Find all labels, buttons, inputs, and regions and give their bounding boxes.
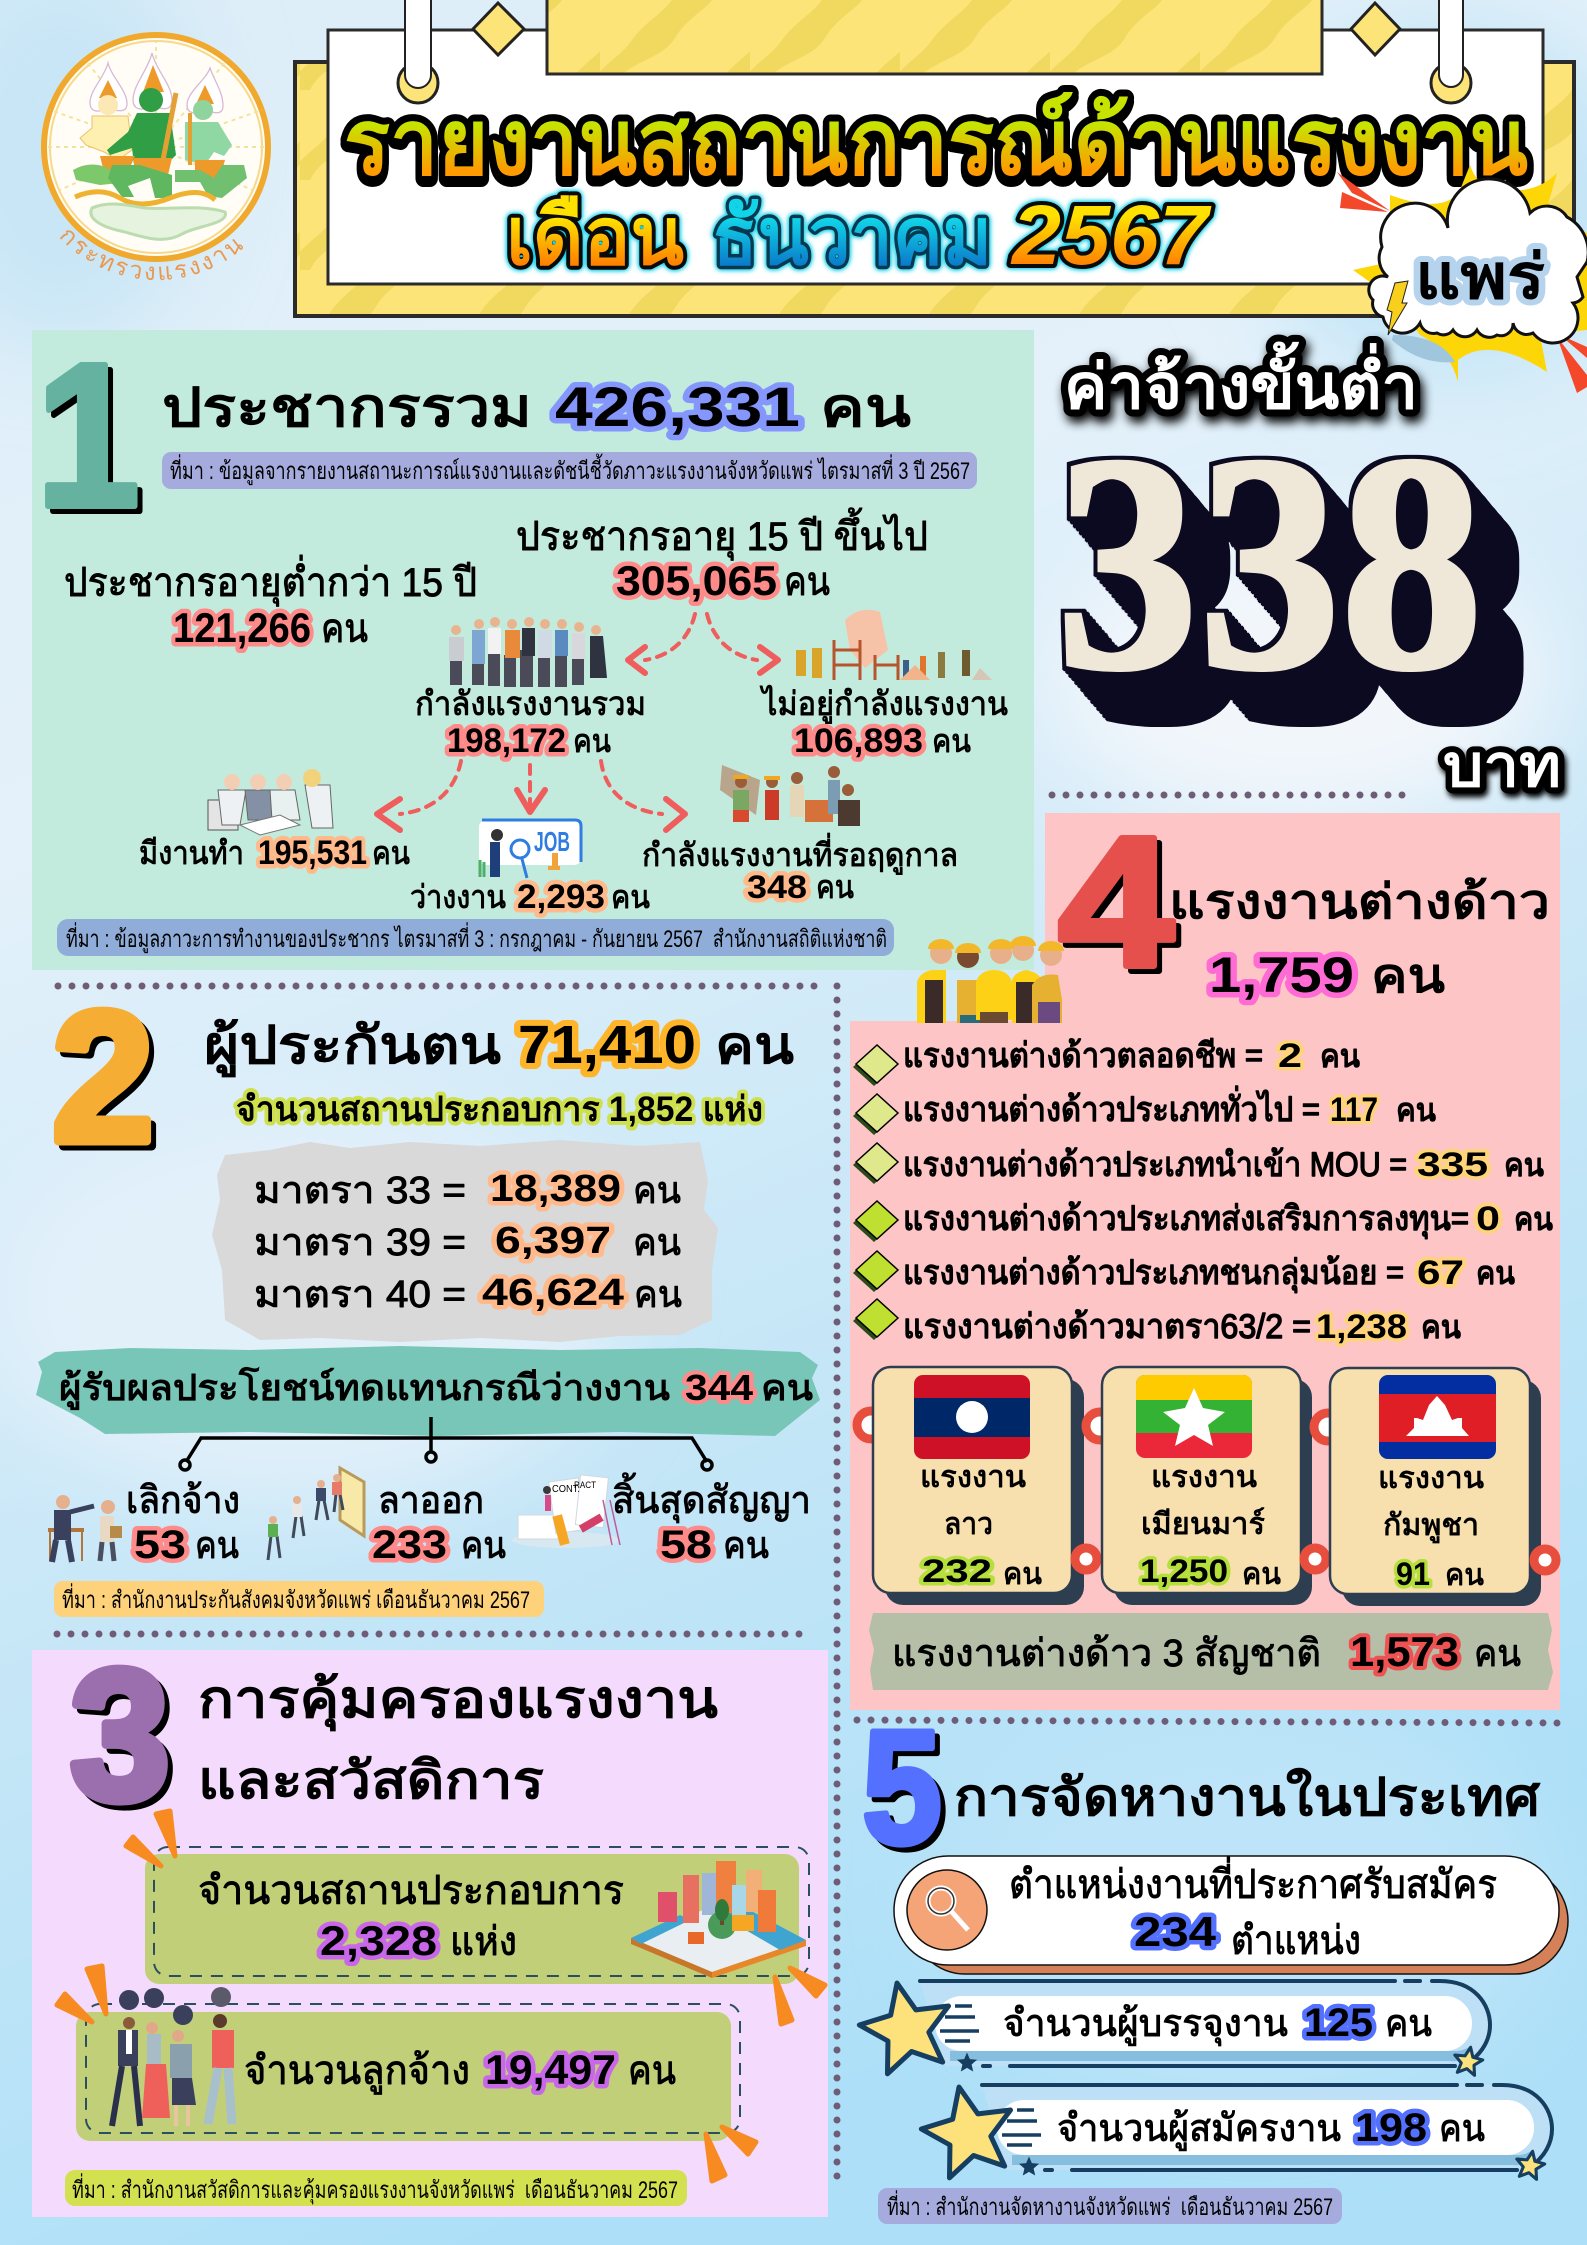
population under 15: คน: [321, 607, 368, 651]
province badge: [1337, 165, 1587, 393]
section table: 46,624: [482, 1272, 624, 1314]
section table: มาตรา 33 =: [254, 1170, 466, 1212]
card: establishments: จำนวนสถานประกอบการ: [198, 1869, 624, 1913]
band: placed: [852, 1974, 1490, 2077]
burst: employees top left: [57, 1966, 106, 2022]
card: Cambodia: [1314, 1368, 1556, 1606]
contract ended: สิ้นสุดสัญญา: [612, 1472, 811, 1523]
benefit band: [36, 1346, 820, 1436]
source note 1: ที่มา : ข้อมูลจากรายงานสถานะการณ์แรงงานและดัชนีชี้วัดภาวะแรงงานจังหวัดแพร่ ไตรมาสที่ 3 ปี 2567: [170, 453, 970, 486]
card: Cambodia: คน: [1445, 1559, 1484, 1592]
wage amount: 338: [1056, 392, 1483, 735]
card: establishments: แห่ง: [450, 1920, 517, 1964]
card: establishments: [145, 1847, 809, 1984]
unemployed: 2,293: [517, 878, 605, 916]
flag: Myanmar: [1136, 1375, 1252, 1458]
badge: red shards: [1337, 172, 1587, 393]
benefit band: คน: [761, 1367, 813, 1408]
burst: employees bottom right: [706, 2127, 756, 2181]
section table: มาตรา 39 =: [254, 1222, 466, 1264]
banner white card: [328, 30, 1543, 284]
row 4: คน: [1514, 1201, 1553, 1237]
panel 1 heading: คน: [820, 378, 911, 438]
unemployed: [410, 878, 650, 916]
minimum wage: [1056, 341, 1561, 799]
banner back panel: [295, 62, 1574, 316]
badge: yellow burst: [1353, 165, 1587, 382]
three nationalities band: แรงงานต่างด้าว 3 สัญชาติ: [892, 1633, 1321, 1675]
population under 15: [64, 555, 477, 651]
outside workforce: ไม่อยู่กำลังแรงงาน: [759, 685, 1008, 724]
source note 4: [65, 2170, 687, 2206]
workforce total: คน: [573, 723, 611, 759]
panel 3: protection: [32, 1632, 828, 2217]
three nationalities band: [869, 1613, 1553, 1690]
section table: คน: [633, 1170, 681, 1212]
pill: vacancies: ตำแหน่ง: [1231, 1919, 1361, 1963]
icon: people: [112, 1987, 234, 2126]
card: employees: จำนวนลูกจ้าง: [244, 2049, 470, 2094]
panel 4 heading: แรงงานต่างด้าว: [1169, 876, 1550, 929]
source note 5: [878, 2188, 1342, 2224]
section table: คน: [633, 1222, 681, 1264]
card: Myanmar: แรงงาน: [1151, 1461, 1257, 1494]
arrow: to unemployed: [517, 765, 545, 812]
source note 4: ที่มา : สำนักงานสวัสดิการและคุ้มครองแรงงานจังหวัดแพร่ เดือนธันวาคม 2567: [72, 2173, 678, 2205]
subtitle: [506, 188, 1211, 282]
panel 1 heading: 426,331: [555, 375, 800, 438]
section table: [212, 1140, 718, 1342]
list of foreign worker types: [853, 1037, 1553, 1346]
panel 4 heading: [1169, 876, 1550, 1003]
band: placed: 125: [1304, 2001, 1373, 2045]
section table: มาตรา 40 =: [254, 1274, 466, 1316]
card: employees: [76, 1987, 740, 2141]
panel 1 heading: ประชากรรวม: [162, 378, 532, 438]
icon: employed team: [208, 769, 333, 835]
wage unit: บาท: [1443, 734, 1561, 799]
three nationalities band: 1,573: [1350, 1628, 1459, 1675]
arrow: to workforce: [628, 614, 695, 673]
row 6: คน: [1421, 1309, 1461, 1345]
benefit band: 344: [685, 1367, 753, 1408]
row 3: แรงงานต่างด้าวประเภทนำเข้า MOU =: [903, 1146, 1407, 1184]
row 2: คน: [1396, 1092, 1436, 1128]
badge: lightning: [1387, 281, 1408, 335]
row 3: 335: [1417, 1146, 1488, 1184]
panel 5: job placement: [852, 1697, 1568, 2224]
row 6: 1,238: [1316, 1308, 1407, 1346]
icon: small star: [1452, 2045, 1485, 2076]
employed: คน: [372, 835, 410, 871]
contract ended: คน: [723, 1525, 769, 1567]
card: Cambodia: 91: [1396, 1556, 1430, 1592]
badge: halftone: [1392, 335, 1455, 362]
panel 3 heading: [198, 1671, 719, 1810]
icon: contract end: RACT: [574, 1480, 596, 1490]
card: Laos: ลาว: [944, 1508, 993, 1541]
numeral 4: 4: [1058, 799, 1174, 1006]
left ring: [398, 0, 438, 103]
card: Myanmar: คน: [1242, 1558, 1281, 1591]
row 1: แรงงานต่างด้าวตลอดชีพ =: [903, 1037, 1263, 1075]
workforce total: กำลังแรงงานรวม: [415, 685, 646, 722]
wage heading: ค่าจ้างขั้นต่ำ: [1064, 341, 1418, 422]
band: placed: จำนวนผู้บรรจุงาน: [1003, 2003, 1288, 2046]
source note 1: [162, 452, 977, 489]
icon: workers with caps: [917, 936, 1064, 1023]
right diamond: [1351, 3, 1400, 55]
row 5: คน: [1476, 1255, 1515, 1291]
card: Myanmar: 1,250: [1140, 1553, 1228, 1589]
section table: 18,389: [490, 1168, 621, 1210]
icon: job search: JOB: [534, 826, 570, 857]
seasonal workforce: กำลังแรงงานที่รอฤดูกาล: [642, 833, 958, 875]
card: Myanmar: [1086, 1367, 1326, 1605]
icon: contract end: CONT.: [552, 1484, 580, 1495]
source note 3: ที่มา : สำนักงานประกันสังคมจังหวัดแพร่ เดือนธันวาคม 2567: [62, 1583, 530, 1614]
icon: magnifier: [907, 1870, 987, 1950]
card: Laos: 232: [922, 1553, 992, 1589]
icon: resignation: [268, 1468, 364, 1560]
pill: vacancies: 234: [1134, 1908, 1217, 1955]
dismissed: คน: [195, 1525, 239, 1567]
row 4: 0: [1476, 1200, 1500, 1238]
panel 2 heading: คน: [715, 1017, 794, 1075]
establishments: จำนวนสถานประกอบการ 1,852 แห่ง: [236, 1090, 763, 1129]
outside workforce: คน: [932, 723, 971, 759]
icon: dismissal: [48, 1495, 122, 1562]
employed: มีงานทำ: [139, 835, 244, 871]
population 15 and over: ประชากรอายุ 15 ปี ขึ้นไป: [516, 507, 928, 561]
section table: คน: [634, 1274, 682, 1316]
numeral 1: 1: [36, 321, 140, 550]
row 1: [853, 1037, 1360, 1086]
icon: job search: [479, 820, 581, 878]
logo: ministry name: กระทรวงแรงงาน: [60, 230, 243, 280]
workforce total: [415, 685, 646, 760]
panel 1: population: [32, 321, 1034, 970]
right ring: [1431, 0, 1471, 103]
band: applicants: [914, 2078, 1552, 2181]
icon: construction: [796, 610, 992, 680]
flag: Cambodia: [1379, 1375, 1496, 1459]
arrow: to seasonal: [601, 761, 685, 830]
header banner: [295, 0, 1574, 316]
dismissed: [126, 1480, 240, 1567]
contract ended: [612, 1472, 811, 1567]
row 5: 67: [1417, 1254, 1464, 1292]
dismissed: เลิกจ้าง: [126, 1480, 240, 1522]
card: Myanmar: เมียนมาร์: [1141, 1507, 1265, 1541]
subtitle: month name: ธันวาคม: [712, 192, 992, 281]
arrow: to outside workforce: [707, 614, 778, 673]
panel 4: foreign workers: [850, 799, 1560, 1710]
panel 2 heading: 71,410: [518, 1015, 696, 1075]
logo: three figures: [73, 53, 247, 204]
panel 4 heading: 1,759: [1209, 947, 1354, 1003]
workforce total: 198,172: [447, 722, 566, 760]
source note 2: [57, 919, 894, 956]
banner top tab: [547, 0, 1322, 74]
icon: city: [631, 1861, 806, 1978]
icon: farmers: [720, 765, 860, 826]
subtitle: month label: เดือน: [506, 192, 684, 281]
panel 2 heading: [204, 1015, 794, 1078]
band: applicants: 198: [1355, 2106, 1427, 2150]
population under 15: ประชากรอายุต่ำกว่า 15 ปี: [64, 555, 477, 607]
contract ended: 58: [660, 1523, 712, 1567]
burst: establishments top left: [126, 1811, 175, 1866]
badge: province name: แพร่: [1415, 243, 1545, 312]
seasonal workforce: [642, 833, 958, 905]
panel 3 heading: การคุ้มครองแรงงาน: [198, 1671, 719, 1732]
three nationalities band: คน: [1474, 1633, 1521, 1675]
row 2: [853, 1086, 1436, 1135]
dismissed: 53: [134, 1523, 186, 1567]
main title: รายงานสถานการณ์ด้านแรงงาน: [344, 91, 1528, 194]
arrow: to employed: [377, 761, 461, 830]
subtitle: year: 2567: [1010, 188, 1211, 282]
row 3: คน: [1504, 1147, 1544, 1183]
icon: small star 2: [1514, 2149, 1547, 2180]
row 2: 117: [1330, 1091, 1378, 1129]
band: applicants: จำนวนผู้สมัครงาน: [1057, 2108, 1341, 2151]
panel 1 heading: [162, 375, 911, 438]
card: employees: คน: [628, 2049, 676, 2093]
badge: cloud: [1369, 179, 1587, 343]
seasonal workforce: 348: [747, 869, 807, 905]
logo: cloud: [91, 204, 225, 239]
row 4: แรงงานต่างด้าวประเภทส่งเสริมการลงทุน=: [903, 1200, 1469, 1239]
card: establishments: 2,328: [320, 1917, 437, 1964]
employed: 195,531: [258, 834, 367, 872]
icon: large star: [852, 1974, 960, 2077]
panel 5 heading: การจัดหางานในประเทศ: [954, 1767, 1541, 1827]
row 1: 2: [1278, 1037, 1302, 1075]
pill: vacancies: ตำแหน่งงานที่ประกาศรับสมัคร: [1009, 1857, 1497, 1907]
icon: large star 2: [914, 2078, 1022, 2181]
row 6: แรงงานต่างด้าวมาตรา63/2 =: [903, 1308, 1311, 1346]
card: Cambodia: แรงงาน: [1378, 1462, 1484, 1495]
card: Cambodia: กัมพูชา: [1383, 1509, 1479, 1543]
burst: establishments bottom right: [775, 1968, 825, 2024]
row 1: คน: [1320, 1038, 1360, 1074]
benefit band: ผู้รับผลประโยชน์ทดแทนกรณีว่างงาน: [59, 1366, 670, 1411]
numeral 5: 5: [862, 1697, 942, 1878]
card: Laos: คน: [1003, 1558, 1042, 1591]
source note 5: ที่มา : สำนักงานจัดหางานจังหวัดแพร่ เดือนธันวาคม 2567: [887, 2190, 1333, 2221]
resigned: 233: [372, 1523, 447, 1567]
unemployed: คน: [611, 879, 650, 915]
connector: [180, 1417, 712, 1470]
panel 3 heading: และสวัสดิการ: [198, 1752, 544, 1810]
icon: contract end: [512, 1475, 620, 1548]
resigned: คน: [461, 1525, 506, 1567]
ministry logo: [41, 32, 271, 280]
row 2: แรงงานต่างด้าวประเภททั่วไป =: [903, 1086, 1320, 1129]
row 6: [853, 1299, 1461, 1346]
resigned: [372, 1480, 506, 1567]
panel 2 heading: ผู้ประกันตน: [204, 1017, 502, 1078]
outside workforce: 106,893: [794, 722, 923, 760]
outside workforce: [759, 685, 1008, 760]
unemployed: ว่างงาน: [410, 879, 506, 915]
population 15 and over: คน: [784, 560, 830, 604]
card: employees: 19,497: [485, 2046, 616, 2093]
panel 4 heading: คน: [1371, 950, 1445, 1003]
band: placed: คน: [1385, 2003, 1432, 2045]
card: Laos: [857, 1367, 1097, 1605]
population under 15: 121,266: [173, 604, 311, 651]
numeral 3: 3: [70, 1632, 170, 1839]
pill: vacancies: [894, 1856, 1568, 1974]
band: applicants: คน: [1439, 2108, 1485, 2150]
card: Laos: แรงงาน: [920, 1461, 1026, 1494]
resigned: ลาออก: [378, 1480, 484, 1522]
population 15 and over: [516, 507, 928, 604]
flag: Laos: [914, 1375, 1030, 1459]
employed: [139, 834, 410, 872]
panel 2: insured: [36, 974, 820, 1617]
population 15 and over: 305,065: [616, 557, 777, 604]
source note 2: ที่มา : ข้อมูลภาวะการทำงานของประชากร ไตรมาสที่ 3 : กรกฎาคม - กันยายน 2567 สำนักงานสถิติแห่งชาติ: [66, 922, 887, 954]
icon: workforce group: [449, 617, 607, 687]
section table: 6,397: [495, 1220, 611, 1262]
row 5: แรงงานต่างด้าวประเภทชนกลุ่มน้อย =: [903, 1254, 1404, 1293]
seasonal workforce: คน: [816, 869, 854, 905]
numeral 2: 2: [52, 974, 154, 1181]
left diamond: [473, 3, 524, 55]
source note 3: [54, 1581, 544, 1617]
